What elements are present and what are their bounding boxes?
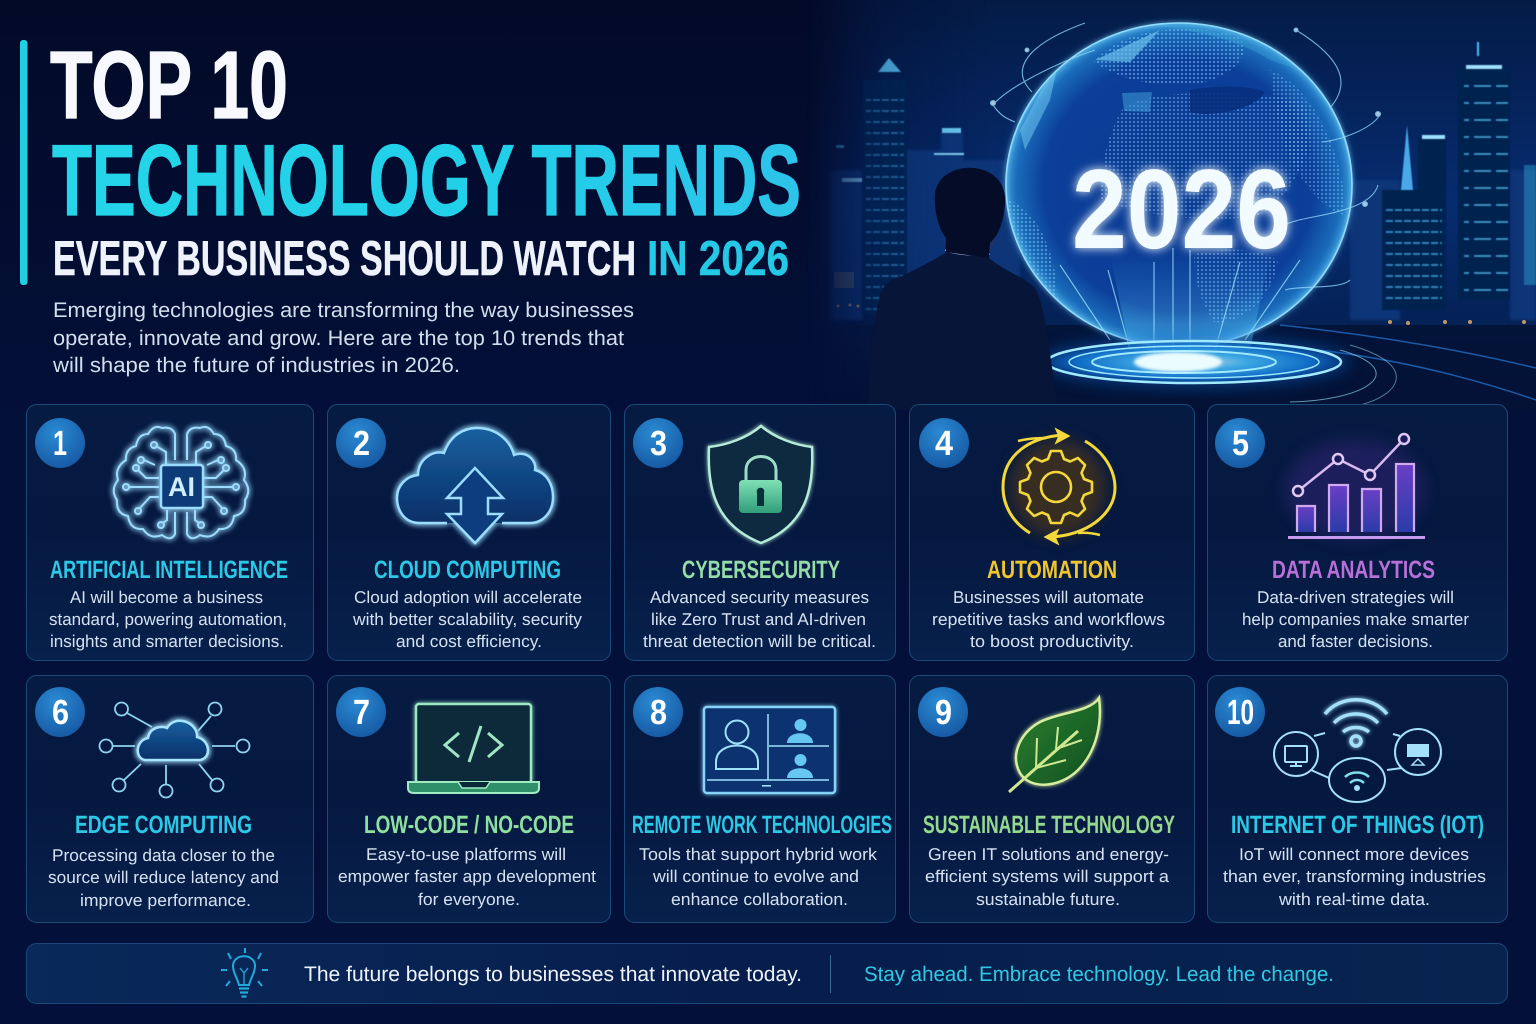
icon: video call tablet [704, 707, 835, 793]
description [643, 588, 876, 651]
description: threat detection will be critical. [643, 632, 876, 651]
heading: AUTOMATION [987, 556, 1117, 584]
title: technology trends: TECHNOLOGY TRENDS [52, 125, 801, 237]
subtitle: EVERY BUSINESS SHOULD WATCH [53, 232, 636, 286]
number badge 4: 4 [935, 424, 953, 463]
description [338, 845, 596, 909]
panel: internet of things [1208, 676, 1508, 922]
description: and faster decisions. [1278, 632, 1433, 651]
panel: cloud computing [328, 404, 610, 660]
description [932, 588, 1165, 651]
accent bar [20, 40, 28, 285]
description: Businesses will automate [953, 588, 1144, 607]
description [925, 845, 1170, 909]
number badge 8: 8 [650, 693, 667, 732]
panel: sustainable technology [910, 676, 1194, 922]
description [352, 588, 583, 651]
panel: footer banner [26, 944, 1508, 1004]
description: AI will become a business [70, 588, 263, 607]
number badge 10: 10 [1227, 693, 1254, 732]
description: to boost productivity. [970, 632, 1134, 651]
description [1242, 588, 1469, 651]
panel: data analytics [1208, 404, 1508, 660]
title: top 10: TOP 10 [50, 32, 288, 139]
number badge 6 [35, 687, 85, 737]
number badge 1 [35, 418, 85, 468]
projector beams [1060, 248, 1300, 362]
heading: CYBERSECURITY [682, 556, 840, 584]
globe continents [1007, 21, 1345, 322]
number badge 2 [336, 418, 386, 468]
number badge 9 [918, 687, 968, 737]
heading: EDGE COMPUTING [75, 811, 252, 839]
description: Tools that support hybrid work [639, 845, 878, 864]
number badge 6: 6 [52, 693, 69, 732]
icon: bar and line chart [1285, 434, 1425, 540]
panel: low-code / no-code [328, 676, 610, 922]
description: Data-driven strategies will [1257, 588, 1454, 607]
description: with better scalability, security [352, 610, 583, 629]
description: help companies make smarter [1242, 610, 1469, 629]
divider [830, 955, 831, 993]
icon: connected devices [1274, 700, 1441, 802]
number badge 1: 1 [53, 424, 67, 463]
2026 label: 2026 [1072, 146, 1291, 272]
icon: light bulb [221, 948, 268, 996]
number badge 2: 2 [353, 424, 370, 463]
number badge 7: 7 [353, 693, 370, 732]
icon: laptop with code [408, 704, 539, 793]
description: Easy-to-use platforms will [366, 845, 566, 864]
footer message: The future belongs to businesses that innovate today. [304, 963, 802, 986]
number badge 3 [633, 418, 683, 468]
heading: LOW-CODE / NO-CODE [364, 811, 574, 839]
description: and cost efficiency. [396, 632, 542, 651]
description: standard, powering automation, [49, 610, 287, 629]
panel: cybersecurity [624, 404, 896, 660]
number badge 3: 3 [650, 424, 667, 463]
description: insights and smarter decisions. [50, 632, 284, 651]
intro text [52, 299, 634, 377]
description: with real-time data. [1278, 890, 1430, 909]
heading: CLOUD COMPUTING [374, 556, 561, 584]
number badge 8 [633, 687, 683, 737]
description: sustainable future. [976, 890, 1120, 909]
icon: green leaf [1009, 698, 1100, 792]
holographic globe [990, 13, 1396, 405]
icon: AI brain [114, 427, 248, 538]
panel: automation [910, 404, 1194, 660]
panel: artificial intelligence [26, 404, 314, 660]
subtitle: IN 2026 [647, 232, 789, 286]
description [639, 845, 878, 909]
heading: REMOTE WORK TECHNOLOGIES [632, 811, 892, 839]
icon: edge cloud network [100, 702, 250, 798]
night sky [822, 0, 1536, 339]
number badge 5 [1215, 418, 1265, 468]
heading: DATA ANALYTICS [1272, 556, 1435, 584]
icon: cloud with arrows [397, 428, 553, 543]
icon: AI brain: AI [168, 472, 195, 502]
description: repetitive tasks and workflows [932, 610, 1165, 629]
description: than ever, transforming industries [1223, 867, 1486, 886]
description [48, 846, 279, 910]
number badge 10 [1215, 687, 1265, 737]
heading: ARTIFICIAL INTELLIGENCE [50, 556, 288, 584]
description: enhance collaboration. [671, 890, 848, 909]
person silhouette [868, 168, 1058, 410]
description [49, 588, 287, 651]
description: improve performance. [80, 891, 251, 910]
description: source will reduce latency and [48, 868, 279, 887]
number badge 9: 9 [935, 693, 952, 732]
description: empower faster app development [338, 867, 596, 886]
description: for everyone. [418, 890, 520, 909]
description: Green IT solutions and energy- [928, 845, 1169, 864]
heading: SUSTAINABLE TECHNOLOGY [923, 811, 1175, 839]
projector platform [1039, 336, 1396, 405]
panel: edge computing [26, 676, 314, 922]
description: like Zero Trust and AI-driven [651, 610, 866, 629]
number badge 7 [336, 687, 386, 737]
description: Processing data closer to the [52, 846, 275, 865]
hero illustration [760, 0, 1536, 410]
description: efficient systems will support a [925, 867, 1170, 886]
intro text: operate, innovate and grow. Here are the top 10 trends that [53, 327, 624, 350]
description: Advanced security measures [650, 588, 869, 607]
intro text: will shape the future of industries in 2026. [52, 354, 460, 377]
footer call to action: Stay ahead. Embrace technology. Lead the change. [864, 963, 1334, 986]
description: will continue to evolve and [652, 867, 859, 886]
description: IoT will connect more devices [1239, 845, 1469, 864]
number badge 4 [919, 418, 969, 468]
number badge 5: 5 [1232, 424, 1249, 463]
intro text: Emerging technologies are transforming the way businesses [53, 299, 634, 322]
city skyline [820, 42, 1536, 410]
orbit lines [990, 23, 1380, 290]
description [1223, 845, 1486, 909]
panel: remote work technologies [624, 676, 896, 922]
icon: gear with cycle arrows [1003, 429, 1115, 544]
description: Cloud adoption will accelerate [354, 588, 582, 607]
title block [20, 32, 801, 286]
icon: shield with lock [709, 426, 812, 543]
